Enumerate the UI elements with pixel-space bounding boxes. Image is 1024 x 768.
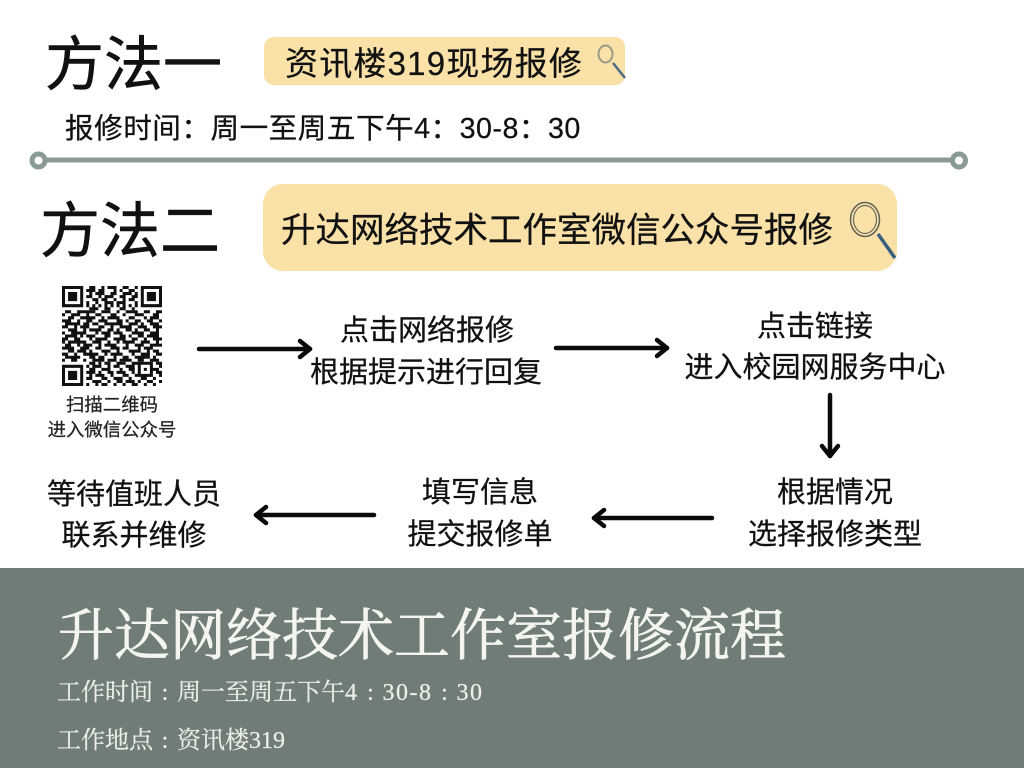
qr code: [62, 286, 162, 386]
step: according to situation: 根据情况: [777, 476, 893, 508]
step: contact and repair: 联系并维修: [61, 520, 206, 552]
step: choose repair type: 选择报修类型: [748, 518, 922, 550]
panel: method one location pill: [264, 37, 625, 85]
text: scan qr caption: 扫描二维码: [66, 394, 158, 415]
panel: method two wechat pill: [263, 184, 897, 271]
panel: footer: [0, 568, 1024, 768]
step: tap network repair: 点击网络报修: [340, 314, 514, 346]
heading: method two: 方法二: [40, 198, 220, 265]
icon: small magnifier: [598, 44, 626, 79]
text: repair hours: 报修时间：周一至周五下午4：30-8：30: [65, 113, 581, 145]
step: reply per prompts: 根据提示进行回复: [310, 356, 542, 388]
step: enter campus network service centre: 进入校园网服务中心: [684, 352, 946, 384]
heading: method one: 方法一: [45, 32, 222, 98]
footer working hours: :: [441, 680, 448, 706]
divider with end rings: [30, 152, 968, 170]
text: method one location: 资讯楼319现场报修: [285, 45, 583, 82]
footer location: 工作地点 资讯楼319: [57, 728, 285, 754]
footer working hours: :: [162, 680, 168, 706]
text: method two wechat account: 升达网络技术工作室微信公众号报修: [281, 212, 833, 250]
text: enter wechat account caption: 进入微信公众号: [48, 419, 176, 440]
step: submit repair form: 提交报修单: [407, 518, 552, 550]
footer location: :: [162, 728, 168, 754]
step: tap link: 点击链接: [757, 310, 873, 342]
footer working hours: :: [367, 680, 374, 706]
icon: large magnifier: [850, 202, 896, 259]
step: fill in information: 填写信息: [422, 476, 538, 508]
footer working hours: 工作时间 周一至周五下午4 30-8 30: [57, 680, 484, 706]
step: wait for staff on duty: 等待值班人员: [47, 478, 221, 510]
footer title: 升达网络技术工作室报修流程: [58, 606, 786, 668]
